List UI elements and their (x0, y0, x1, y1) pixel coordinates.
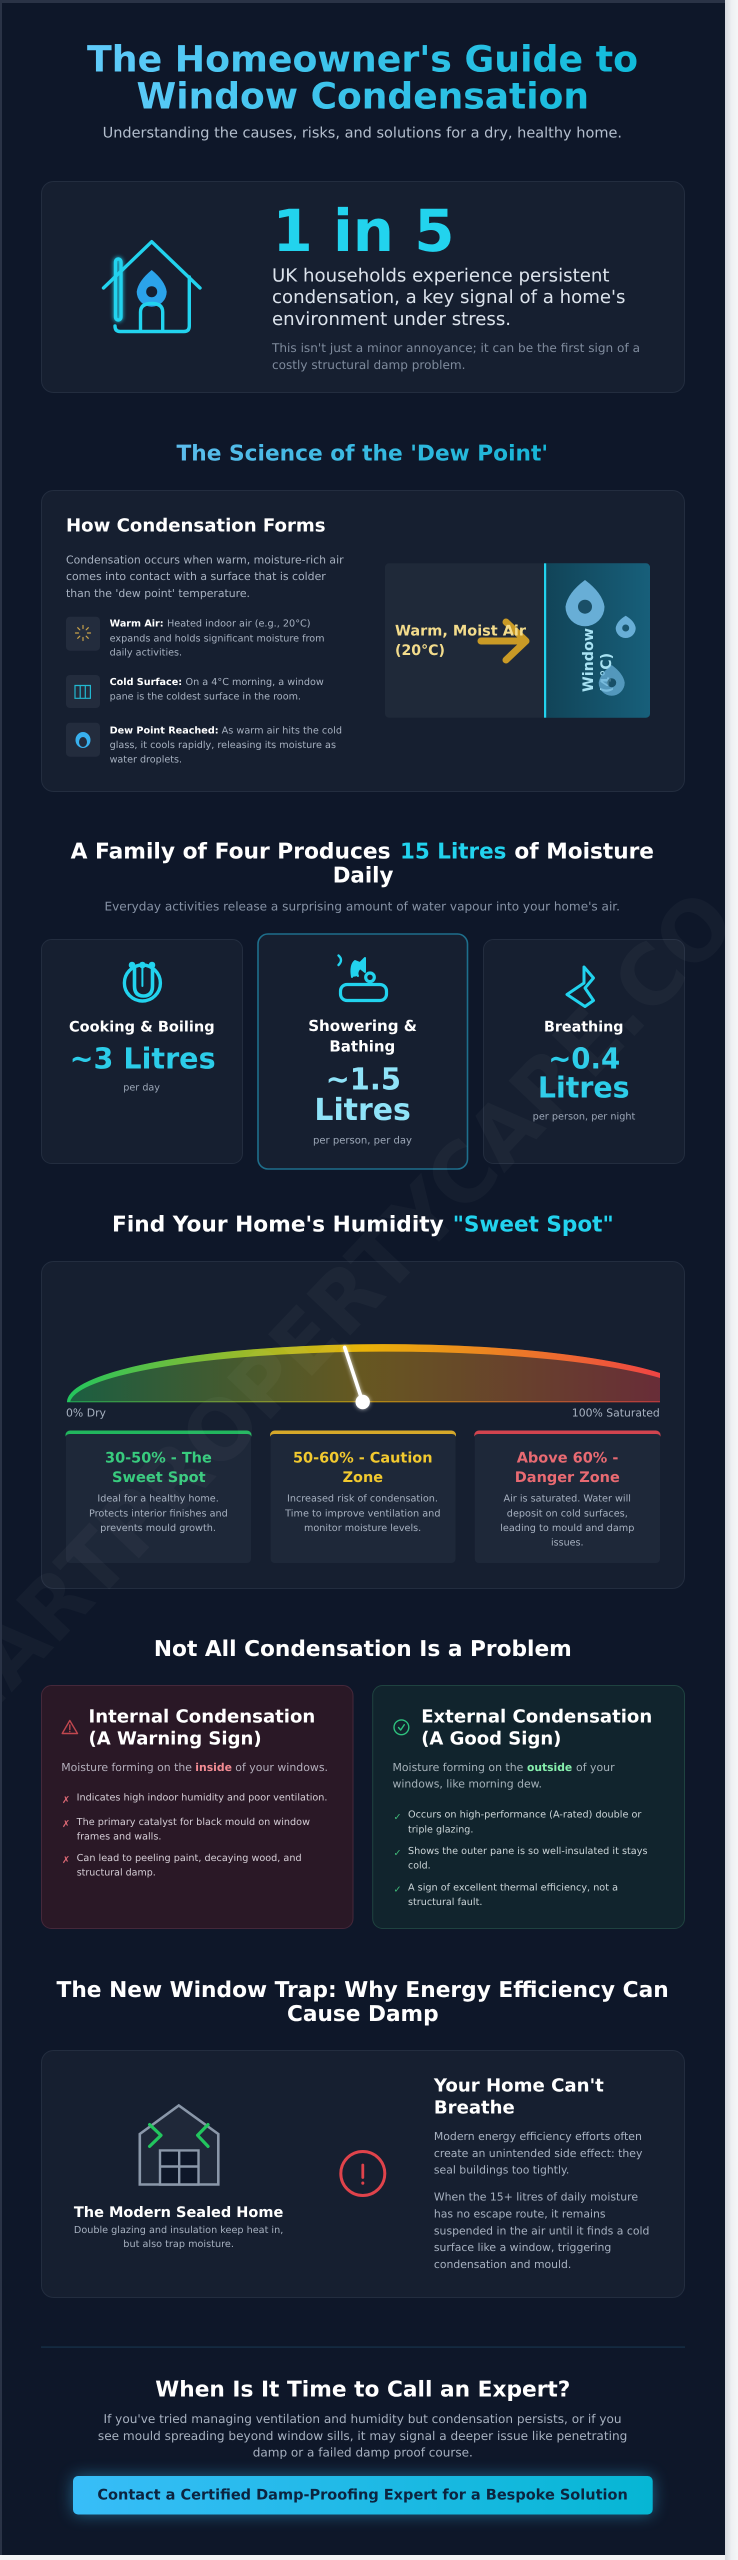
card value: Litres (538, 1070, 630, 1104)
intro text: comes into contact with a surface that is colder (66, 570, 326, 583)
house description (74, 2225, 283, 2250)
statistic description: environment under stress. (272, 309, 511, 330)
card intro: inside (195, 1761, 232, 1774)
expert text (98, 2412, 627, 2460)
label: warm moist air (395, 624, 527, 659)
card intro: of your (576, 1761, 615, 1774)
step: dew point reached (66, 723, 342, 765)
zone card: sweet spot: Ideal for a healthy home. (97, 1494, 219, 1505)
heading: family of four moisture: Daily (333, 864, 393, 889)
card heading: External Condensation (421, 1707, 652, 1728)
icon: droplet (66, 723, 100, 757)
step: cold surface: On a 4°C morning, a window (186, 677, 324, 688)
card note: per day (123, 1082, 160, 1093)
call to action button (73, 2476, 653, 2514)
side text (434, 2130, 649, 2271)
zone card: danger: Above 60% - (517, 1451, 618, 1467)
card title: Showering & (308, 1017, 417, 1035)
card heading: (A Good Sign) (421, 1728, 561, 1749)
warning list: frames and walls. (77, 1831, 161, 1842)
label: window temperature: Window (581, 628, 597, 692)
good sign list: Shows the outer pane is so well-insulated it stays (408, 1846, 648, 1857)
zone card: caution: Increased risk of condensation. (287, 1494, 438, 1505)
card intro: Moisture forming on the (61, 1761, 192, 1774)
good sign list: triple glazing. (408, 1824, 473, 1835)
title: The Homeowner's Guide to (87, 38, 638, 81)
card heading: (A Warning Sign) (88, 1728, 262, 1749)
card intro (61, 1761, 328, 1774)
intro text (66, 553, 344, 600)
card title: Bathing (329, 1038, 395, 1056)
card heading (421, 1707, 652, 1749)
card value: ~3 Litres (70, 1041, 216, 1075)
panel: how condensation forms (41, 490, 685, 2525)
good sign list: cold. (408, 1861, 431, 1872)
side heading: Your Home Can't (433, 2076, 604, 2097)
card title: Breathing (544, 1020, 624, 1036)
heading: family of four moisture: 15 Litres (400, 839, 506, 864)
heading: family of four moisture (71, 839, 654, 889)
zone card: danger: leading to mould and damp (500, 1523, 634, 1534)
heading: new window trap (56, 1978, 669, 2027)
warning list: Can lead to peeling paint, decaying wood, and (77, 1853, 302, 1864)
expert text: see mould spreading beyond window sills, it may signal a deeper issue like penetrating (98, 2429, 627, 2443)
step: warm air: expands and holds significant moisture from (110, 633, 325, 644)
house description: but also trap moisture. (123, 2239, 234, 2250)
step: dew point reached: As warm air hits the cold (222, 725, 342, 736)
panel: external condensation (373, 1686, 684, 1928)
zone card: caution: monitor moisture levels. (304, 1523, 421, 1534)
good sign list: Occurs on high-performance (A-rated) double or (408, 1810, 641, 1821)
warning list (62, 1793, 328, 1879)
panel: humidity gauge and zones (42, 1262, 684, 1588)
warning list: ✗ (62, 1819, 70, 1830)
step: warm air: Heated indoor air (e.g., 20°C) (167, 619, 311, 630)
card value: ~0.4 (548, 1041, 620, 1075)
zone card: danger: deposit on cold surfaces, (507, 1508, 628, 1519)
label: warm moist air: (20°C) (395, 643, 445, 659)
panel: modern sealed home (42, 2050, 684, 2298)
heading: new window trap: The New Window Trap: Why Energy Efficiency Can (56, 1978, 669, 2003)
card intro: of your windows. (235, 1761, 328, 1774)
card value: ~1.5 (326, 1062, 401, 1097)
arrow (481, 622, 526, 660)
panel: internal condensation (42, 1686, 353, 1928)
panel: breathing (484, 940, 684, 1164)
step: dew point reached: glass, it cools rapidly, releasing its moisture as (110, 740, 336, 751)
good sign list: ✓ (394, 1848, 402, 1859)
panel: 1 in 5 statistic (42, 182, 684, 392)
card value: Litres (314, 1093, 411, 1128)
water droplets (566, 580, 636, 696)
heading: not all condensation: Not All Condensation Is a Problem (154, 1637, 572, 1662)
good sign list: A sign of excellent thermal efficiency, not a (408, 1882, 618, 1893)
statistic note: costly structural damp problem. (272, 358, 466, 372)
house description: Double glazing and insulation keep heat in, (74, 2225, 283, 2236)
warning list: ✗ (62, 1795, 70, 1806)
side text: Modern energy efficiency efforts often (434, 2130, 642, 2143)
step: cold surface: pane is the coldest surface in the room. (110, 691, 301, 702)
expert text: If you've tried managing ventilation and humidity but condensation persists, or if you (104, 2412, 622, 2426)
statistic note: This isn't just a minor annoyance; it can be the first sign of a (271, 341, 640, 355)
heading: call an expert: When Is It Time to Call an Expert? (155, 2377, 570, 2402)
side heading: Breathe (434, 2098, 515, 2118)
warning list: The primary catalyst for black mould on window (76, 1817, 310, 1828)
card intro: windows, like morning dew. (392, 1778, 542, 1791)
warning list: Indicates high indoor humidity and poor ventilation. (77, 1793, 328, 1804)
side text: create an unintended side effect: they (434, 2147, 643, 2160)
side text: suspended in the air until it finds a cold (434, 2224, 649, 2237)
intro text: than the 'dew point' temperature. (66, 587, 250, 600)
call to action button: Contact a Certified Damp-Proofing Expert for a Bespoke Solution (97, 2487, 628, 2504)
step: warm air: Warm Air: (110, 619, 164, 630)
house caption: The Modern Sealed Home (74, 2205, 283, 2221)
zone card: caution (271, 1431, 456, 1563)
title: Window Condensation (136, 74, 589, 117)
card note: per person, per night (533, 1111, 636, 1122)
diagram: warm air meeting cold window (385, 563, 650, 718)
zone card: caution: 50-60% - Caution (293, 1451, 432, 1467)
statistic description: condensation, a key signal of a home's (272, 287, 626, 308)
side heading (433, 2076, 604, 2118)
step: warm air: daily activities. (110, 648, 182, 659)
expert text: damp or a failed damp proof course. (253, 2446, 473, 2460)
good sign list: structural fault. (408, 1897, 482, 1908)
gauge labels: 100% Saturated (572, 1407, 660, 1420)
card title: Cooking & Boiling (69, 1020, 215, 1036)
icon: lungs (567, 967, 594, 1006)
title (87, 38, 638, 117)
side text: surface like a window, triggering (434, 2241, 611, 2254)
icon: sun (66, 617, 100, 651)
step: cold surface: Cold Surface: (110, 677, 182, 688)
statistic note (271, 341, 640, 372)
card intro: outside (527, 1761, 572, 1774)
card value (314, 1062, 411, 1128)
heading: family of four moisture: A Family of Four Produces (71, 839, 391, 864)
zone card: danger: issues. (551, 1538, 584, 1549)
heading: humidity sweet spot: "Sweet Spot" (453, 1213, 614, 1238)
warning list: structural damp. (77, 1868, 156, 1879)
step: cold surface (66, 675, 324, 708)
label: warm moist air: Warm, Moist Air (395, 624, 527, 640)
big number: 1 in 5 (272, 197, 454, 265)
zone card: caution: Time to improve ventilation and (284, 1508, 440, 1519)
icon: bath (338, 956, 386, 1000)
zone card: sweet spot: 30-50% - The (105, 1451, 212, 1467)
zone card: sweet spot: Sweet Spot (112, 1470, 206, 1486)
card note: per person, per day (313, 1135, 412, 1146)
step: dew point reached: water droplets. (110, 754, 182, 765)
zone card: danger: Air is saturated. Water will (504, 1494, 631, 1505)
gauge labels: 0% Dry (66, 1407, 107, 1420)
panel: cooking and boiling (42, 940, 242, 1164)
heading: humidity sweet spot: Find Your Home's Humidity (112, 1213, 444, 1238)
side text: seal buildings too tightly. (434, 2164, 569, 2177)
statistic description (272, 266, 626, 330)
gauge chart (67, 1344, 660, 1409)
card intro: Moisture forming on the (392, 1761, 524, 1774)
gauge labels (66, 1407, 660, 1420)
zone card: danger: Danger Zone (515, 1470, 620, 1486)
icon: warning triangle (62, 1720, 78, 1734)
step: dew point reached: Dew Point Reached: (110, 725, 219, 736)
statistic description: UK households experience persistent (272, 266, 610, 286)
warning list: ✗ (62, 1855, 70, 1866)
icon: sealed house (140, 2106, 218, 2184)
icon: pot (124, 963, 160, 1001)
side text: condensation and mould. (434, 2258, 571, 2271)
card value (538, 1041, 630, 1104)
heading: humidity sweet spot (112, 1213, 614, 1238)
card intro (392, 1761, 615, 1791)
panel: showering and bathing (258, 934, 468, 1169)
subtitle: Understanding the causes, risks, and solutions for a dry, healthy home. (103, 126, 622, 142)
good sign list: ✓ (394, 1884, 402, 1896)
label: window temperature (581, 628, 615, 693)
label: window temperature: (4°C) (599, 653, 615, 693)
heading: science of the dew point: The Science of the 'Dew Point' (176, 442, 548, 467)
intro text: Condensation occurs when warm, moisture-rich air (66, 553, 344, 566)
heading: new window trap: Cause Damp (287, 2002, 439, 2027)
icon: window (66, 675, 100, 708)
good sign list (394, 1810, 648, 1908)
needle (345, 1348, 370, 1409)
heading: family of four moisture: of Moisture (514, 839, 654, 864)
step: warm air (66, 617, 325, 659)
icon: house with water drop (104, 242, 200, 332)
side text: When the 15+ litres of daily moisture (434, 2190, 638, 2203)
card title (308, 1017, 417, 1056)
zone card: sweet spot: Protects interior finishes and (89, 1508, 228, 1519)
card heading (88, 1707, 315, 1749)
zone card: caution: Zone (343, 1470, 383, 1486)
good sign list: ✓ (394, 1812, 402, 1823)
panel heading: How Condensation Forms (66, 516, 326, 537)
side text: has no escape route, it remains (434, 2208, 606, 2221)
zone card: danger (475, 1431, 660, 1563)
section intro: Everyday activities release a surprising amount of water vapour into your home's air. (104, 900, 620, 914)
zone card: sweet spot: prevents mould growth. (100, 1523, 216, 1534)
card heading: Internal Condensation (88, 1707, 315, 1728)
zone card: sweet spot (66, 1431, 251, 1563)
icon: alert (341, 2152, 385, 2196)
icon: check circle (394, 1720, 409, 1735)
